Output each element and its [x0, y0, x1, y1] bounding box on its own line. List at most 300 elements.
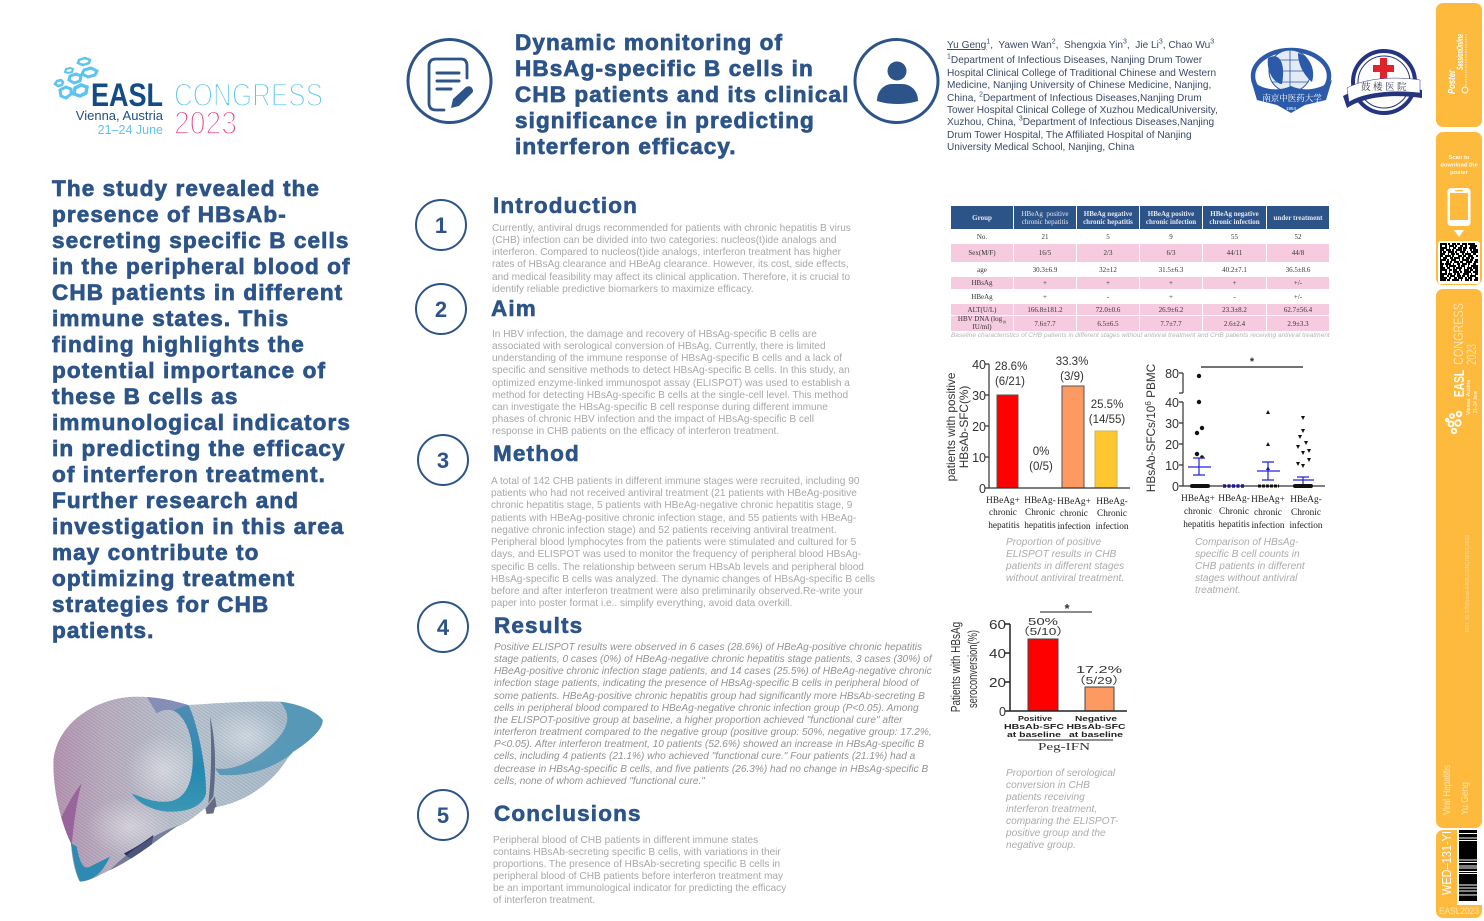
category labels: at baseline [1069, 730, 1123, 739]
bars [1028, 639, 1114, 711]
axes [1179, 373, 1325, 486]
text: results: Positive ELISPOT results were observed in 6 cases (28.6%) of HBeAg-positive chronic hepatitis [494, 642, 922, 653]
table: baseline characteristics: HBsAg [971, 279, 992, 287]
text: aim: In HBV infection, the damage and recovery of HBsAg-specific B cells are [492, 329, 817, 340]
bar value labels: (6/21) [995, 376, 1025, 388]
heading: introduction: Introduction [493, 193, 638, 218]
table: baseline characteristics: 55 [1231, 232, 1238, 240]
y axis title: patients with positive [944, 372, 958, 481]
category labels: HBeAg- [1024, 496, 1056, 506]
text: conclusions [493, 835, 786, 906]
icon: section number 1: 1 [435, 213, 447, 238]
axis values [1165, 367, 1179, 494]
table: baseline characteristics: + [1106, 279, 1110, 287]
mean and error bars [1188, 458, 1314, 484]
category labels: hepatitis [988, 521, 1020, 531]
affiliations: Drum Tower Hospital, The Affiliated Hospital of Nanjing [947, 130, 1192, 141]
logo: Nanjing Drum Tower Hospital [1343, 49, 1422, 115]
table: baseline characteristics: - [1233, 292, 1236, 300]
author names: Yu Geng1, Yawen Wan2, Shengxia Yin3, Jie Li3, Chao Wu3 [947, 39, 1214, 51]
heading: method: Method [493, 441, 580, 466]
caption: chart 2 [1195, 537, 1305, 596]
text: results: decrease in HBsAg-specific B cells, and five patients (26.3%) had no change in HBsAg-specific B [494, 764, 928, 775]
table: baseline characteristics: ALT(U/L) [968, 306, 996, 314]
text: results: infection stage patients, indicating the presence of HBsAg-specific B cells in peripheral blood of [494, 678, 919, 689]
icon: section number 5: 5 [437, 803, 449, 828]
Peg-IFN group label: Peg-IFN [1038, 741, 1090, 753]
sidebar panel: Poster Session Online [1436, 3, 1482, 127]
category labels: HBsAb-SFC [1066, 722, 1126, 731]
icon: section number 3 [417, 434, 469, 486]
caption: chart 2: treatment. [1195, 585, 1241, 596]
table: baseline characteristics: HBeAg negative [1084, 210, 1132, 218]
category labels: HBeAg- [1290, 495, 1322, 505]
heading: aim: Aim [491, 296, 537, 321]
axes [1005, 624, 1127, 711]
table: baseline characteristics: 2/3 [1104, 249, 1112, 257]
text: introduction: interferon. Compared to nucleos(t)ide analogs, interferon treatment has higher [492, 247, 841, 258]
icon: section number 2: 2 [435, 297, 447, 322]
table: baseline characteristics [951, 206, 1329, 331]
caption: chart 1 [1006, 537, 1124, 584]
affiliations [947, 54, 1218, 153]
title [515, 30, 849, 159]
table: baseline characteristics: 52 [1294, 232, 1302, 240]
text: aim: associated with serological conversion of HBsAg. Currently, there is limited [492, 341, 826, 352]
category labels: Chronic [1291, 508, 1321, 518]
affiliations: 1Department of Infectious Diseases, Nanjing Drum Tower [947, 54, 1202, 66]
table: baseline characteristics: 44/11 [1227, 249, 1242, 257]
text: results: cells in peripheral blood compared to HBeAg-negative chronic infection group (P<0.05). Among [494, 703, 919, 714]
text: method: paper into poster format i.e.. simplify everything, avoid data overkill. [491, 598, 792, 609]
bar value labels [995, 356, 1125, 473]
topic and author: Viral Hepatitis [1441, 765, 1453, 815]
key message text: strategies for CHB [52, 592, 269, 617]
heading: results: Results [494, 613, 583, 638]
axis values: 60 [989, 618, 1006, 632]
category labels: at baseline [1007, 730, 1061, 739]
logo: Nanjing University of Chinese Medicine: 1954 [1286, 106, 1297, 111]
text: method: chronic hepatitis stage, 5 patients with HBeAg-negative chronic hepatitis stage, 9 [491, 500, 852, 511]
key message text [52, 176, 351, 643]
text: results [494, 642, 932, 787]
key message text: The study revealed the [52, 176, 320, 201]
table: baseline characteristics: 36.5±8.6 [1286, 266, 1310, 274]
category labels: infection [1251, 520, 1285, 531]
table: baseline characteristics: HBeAg positive [1148, 210, 1194, 218]
barcode [1457, 830, 1482, 905]
table: baseline characteristics: 26.9±6.2 [1159, 306, 1183, 314]
caption: chart 3: positive group and the [1006, 828, 1106, 839]
y axis title: HBsAb-SFC(%) [957, 386, 971, 468]
data points: group 3 [1258, 410, 1279, 486]
affiliations: Xuzhou, China, 3Department of Infectious Diseases,Nanjing [947, 116, 1214, 128]
text: introduction [492, 223, 851, 295]
category labels: chronic [989, 508, 1017, 518]
text: results: some patients. HBeAg-positive chronic hepatitis group had significantly more HBsAb-secreting B [494, 691, 925, 702]
category labels: chronic [1060, 509, 1088, 519]
scan instruction: Scan to [1449, 155, 1470, 161]
table: baseline characteristics: chronic hepatitis [1022, 218, 1068, 226]
text: introduction: (CHB) infection can be divided into two categories: nucleos(t)ide analogs and [492, 235, 837, 246]
text: introduction: identify reliable predictive biomarkers to maximize efficacy. [492, 284, 754, 295]
title: CHB patients and its clinical [515, 82, 849, 107]
bar value labels [1016, 616, 1126, 687]
caption: chart 3: Proportion of serological [1006, 768, 1115, 779]
category labels: Chronic [1219, 507, 1249, 517]
sidebar panel: congress and topic [1436, 289, 1482, 828]
text: aim: specific and sensitive methods to detect HBsAg-specific B cells. In this study, an [492, 365, 850, 376]
text: introduction: and medical feasibility may affect its clinical application. Therefore, it is crucial to [492, 272, 850, 283]
bar value labels: 50% [1028, 616, 1058, 628]
text: method: patients with HBeAg-positive chronic infection stage, and 55 patients with HBeAg- [491, 513, 856, 524]
text: method: before and after interferon treatment were also preliminarily observed.Re-write your [491, 586, 863, 597]
axis values: 40 [1165, 396, 1179, 410]
panel: aim [415, 283, 850, 437]
table: baseline characteristics: chronic infection [1146, 218, 1196, 226]
category labels: Chronic [1097, 509, 1127, 519]
table: baseline characteristics: IU/ml) [972, 322, 992, 330]
axis values: 10 [972, 451, 986, 465]
table: baseline characteristics: - [1107, 292, 1109, 300]
key message text: patients. [52, 618, 154, 643]
key message text: in the peripheral blood of [52, 254, 351, 279]
icon: section number 2 [415, 283, 467, 335]
y axis title: HBsAb-SFCs/10 [1144, 406, 1158, 492]
text: conclusions: proportions. The presence of HBsAb-secreting specific B cells in [493, 859, 780, 870]
logo: EASL Congress 2023: 2023 [174, 105, 237, 141]
affiliations: Medicine, Nanjing University of Chinese Medicine, Nanjing, [947, 80, 1211, 91]
axis values: 20 [1165, 438, 1179, 452]
icon: document with pencil [406, 38, 492, 124]
chart: serological conversion [950, 601, 1127, 753]
category labels: HBeAg+ [1057, 497, 1091, 507]
caption: chart 2: specific B cell counts in [1195, 549, 1300, 560]
significance bracket [1201, 356, 1303, 368]
table: baseline characteristics: HBeAg [971, 292, 993, 300]
bar value labels: 0% [1033, 446, 1049, 458]
scan instruction: download the [1440, 162, 1478, 168]
key message text: these B cells as [52, 384, 238, 409]
table: baseline characteristics: HBeAg positive [1021, 210, 1069, 218]
caption: chart 1: without antiviral treatment. [1006, 573, 1124, 584]
bar value labels: （5/29） [1072, 675, 1126, 687]
category labels: HBeAg- [1096, 497, 1128, 507]
bar value labels: 33.3% [1056, 356, 1088, 368]
affiliations: Tower Hospital Clinical College of Xuzhou MedicalUniversity, [947, 105, 1218, 116]
text: results: the ELISPOT-positive group at baseline, a higher proportion achieved "functional cure" after [494, 715, 903, 726]
caption: chart 3: conversion in CHB [1006, 780, 1090, 791]
scan instruction [1440, 155, 1478, 176]
table: baseline characteristics: + [1043, 279, 1047, 287]
caption: chart 2: CHB patients in different [1195, 561, 1305, 572]
heading: conclusions: Conclusions [494, 801, 642, 826]
text: aim: optimized enzyme-linked immunospot assay (ELISPOT) was used to establish a [492, 378, 850, 389]
title: HBsAg-specific B cells in [515, 56, 814, 81]
category labels [986, 496, 1129, 532]
chart: proportion of positive ELISPOT results [944, 356, 1130, 532]
rotated congress logo: 21–24 June [1473, 391, 1479, 413]
table: baseline characteristics: 166.8±181.2 [1027, 306, 1063, 314]
table: baseline characteristics: age [977, 266, 987, 274]
category labels: chronic [1184, 507, 1212, 517]
text: conclusions: of interferon treatment. [493, 895, 595, 906]
text: method: HBsAg-specific B cells was analyzed. The dynamic changes of HBsAg-specific B cells [491, 574, 875, 585]
icon: author [854, 38, 940, 124]
table: baseline characteristics: +/- [1294, 292, 1302, 300]
key message text: immune states. This [52, 306, 289, 331]
y axis title [944, 372, 971, 481]
axis values: 0 [999, 705, 1006, 719]
category labels: hepatitis [1183, 520, 1215, 530]
title: Dynamic monitoring of [515, 30, 783, 55]
caption: chart 3 [1006, 768, 1118, 851]
data points: group 2 [1223, 484, 1245, 488]
bar value labels: （5/10） [1016, 626, 1070, 638]
text: method: days, and ELISPOT was used to monitor the frequency of peripheral blood HBsAg- [491, 549, 861, 560]
table: baseline characteristics: + [1233, 279, 1236, 287]
axis values: 20 [972, 420, 986, 434]
axis values: 0 [1172, 480, 1179, 494]
caption: chart 1: Proportion of positive [1006, 537, 1101, 548]
table: baseline characteristics: 2.9±3.3 [1287, 320, 1309, 328]
authors and affiliations [947, 38, 1218, 153]
y axis title [950, 622, 980, 712]
text: results: stage patients, 0 cases (0%) of HBeAg-negative chronic hepatitis stage patients, 3 cases (30%) of [494, 654, 932, 665]
bar value labels: 28.6% [995, 361, 1027, 373]
category labels: Positive [1018, 714, 1052, 723]
category labels: infection [1095, 521, 1129, 532]
title: interferon efficacy. [515, 134, 737, 159]
y axis title: Patients with HBsAg [950, 622, 963, 712]
significance line [1040, 601, 1092, 616]
table: baseline characteristics: + [1169, 292, 1173, 300]
text: method: patients who had not received antiviral treatment (21 patients with HBeAg-positive [491, 488, 857, 499]
table: baseline characteristics: HBeAg negative [1210, 210, 1259, 218]
congress tag: EASL2023 [1439, 906, 1479, 916]
logo: EASL Congress 2023: EASL [91, 77, 163, 113]
table: baseline characteristics: 9 [1169, 232, 1173, 240]
text: aim [492, 329, 850, 437]
table: baseline characteristics: chronic infection [1209, 218, 1260, 226]
key message text: in predicting the efficacy [52, 436, 346, 461]
text: aim: can investigate the HBsAg-specific B cell response during different immune [492, 402, 828, 413]
caption: chart 2: stages without antiviral [1195, 573, 1297, 584]
significance line: * [1064, 601, 1070, 616]
caption: chart 3: patients receiving [1006, 792, 1085, 803]
category labels: Negative [1075, 714, 1117, 723]
chart: HBsAb-SFCs counts [1144, 356, 1325, 531]
text: aim: response in CHB patients on the efficacy of interferon treatment. [492, 426, 779, 437]
panel: results [417, 601, 932, 787]
axis values: 20 [989, 676, 1006, 690]
sidebar panel: Poster Session Online: SessionOnline [1455, 34, 1466, 70]
table: baseline characteristics: Sex(M/F) [968, 249, 996, 257]
text: aim: method for detecting HBsAg-specific B cells at the single-cell level. This method [492, 390, 848, 401]
caption: chart 1: patients in different stages [1006, 561, 1124, 572]
bar value labels: 25.5% [1091, 399, 1123, 411]
axes [985, 364, 1130, 488]
text: conclusions: be an important immunological indicator for predicting the efficacy [493, 883, 786, 894]
key message text: potential importance of [52, 358, 326, 383]
table: baseline characteristics: 6.5±6.5 [1097, 320, 1119, 328]
icon: section number 4 [417, 601, 469, 653]
data points: group 4 [1293, 416, 1313, 488]
bar value labels: (14/55) [1089, 414, 1125, 426]
axis values: 0 [979, 482, 986, 496]
table: baseline characteristics: + [1043, 292, 1047, 300]
y axis title: PBMC [1144, 363, 1158, 401]
category labels: HBeAg+ [986, 496, 1020, 506]
title: significance in predicting [515, 108, 815, 133]
Peg-IFN group label [1018, 740, 1113, 753]
affiliations: China, 2Department of Infectious Diseases,Nanjing Drum [947, 91, 1202, 104]
icon: section number 3: 3 [437, 448, 449, 473]
table: baseline characteristics: 16/5 [1039, 249, 1051, 257]
axis values: 80 [1165, 367, 1179, 381]
category labels: HBeAg+ [1181, 494, 1215, 504]
table: baseline characteristics: 21 [1042, 232, 1048, 240]
sidebar panel: scan QR code [1436, 132, 1482, 285]
topic and author [1441, 765, 1471, 815]
table: baseline characteristics: 6/3 [1167, 249, 1175, 257]
DOI text: DOI: 10.3252/pose.EASLCONGRESS.2023 [1465, 535, 1471, 632]
icon: section number 4: 4 [437, 615, 450, 640]
y axis title: 6 [1144, 401, 1153, 406]
table: baseline characteristics: 2.6±2.4 [1224, 320, 1245, 328]
sidebar panel: poster code and barcode [1436, 830, 1482, 918]
icon: section number 1 [415, 199, 467, 251]
panel: conclusions [417, 789, 786, 906]
logo: EASL Congress 2023: 21–24 June [98, 123, 163, 137]
category labels [1004, 714, 1126, 739]
panel: introduction [415, 193, 851, 295]
key message text: of interferon treatment. [52, 462, 326, 487]
category labels: HBeAg- [1218, 494, 1250, 504]
table: baseline characteristics: 23.3±8.2 [1222, 306, 1247, 314]
y axis title: seroconversion(%) [967, 630, 980, 708]
table: baseline characteristics: 31.5±6.3 [1159, 266, 1183, 274]
text: conclusions: contains HBsAb-secreting specific B cells, with variations in their [493, 847, 781, 858]
key message text: Further research and [52, 488, 299, 513]
caption: chart 3: negative group. [1006, 840, 1076, 851]
key message text: secreting specific B cells [52, 228, 349, 253]
QR code [1438, 241, 1480, 284]
table: baseline characteristics: 7.6±7.7 [1034, 320, 1056, 328]
logo: EASL Congress 2023 [53, 56, 323, 141]
category labels [1181, 494, 1323, 531]
bar value labels: (3/9) [1060, 371, 1084, 383]
table: baseline characteristics: 72.0±0.6 [1096, 306, 1120, 314]
key message text: optimizing treatment [52, 566, 295, 591]
category labels: Chronic [1025, 508, 1055, 518]
category labels: infection [1057, 521, 1091, 532]
table caption: Baseline characteristics of CHB patients in different stages without antiviral treatment and CHB patients receiving antiviral treatment [951, 332, 1330, 339]
table: baseline characteristics: No. [977, 232, 987, 240]
caption: chart 2: Comparison of HBsAg- [1195, 537, 1299, 548]
text: method: specific B cells. The relationship between serum HBsAb levels and peripheral blood [491, 562, 864, 573]
caption: chart 3: interferon treatment, [1006, 804, 1097, 815]
text: method: negative chronic infection stage) and 52 patients receiving antiviral treatment. [491, 525, 837, 536]
table: baseline characteristics: 30.3±6.9 [1033, 266, 1057, 274]
text: aim: understanding of the immune response of HBsAg-specific B cells and a lack of [492, 353, 842, 364]
text: introduction: Currently, antiviral drugs recommended for patients with chronic hepatitis B virus [492, 223, 851, 234]
text: results: interferon treatment compared to the negative group (positive group: 50%, negative group: 17.2%, [494, 727, 932, 738]
table: baseline characteristics: 40.2±7.1 [1222, 266, 1247, 274]
bars [997, 386, 1117, 488]
text: introduction: rates of HBsAg clearance and HBeAg clearance. However, its cost, side effects, [492, 259, 849, 270]
affiliations: University Medical School, Nanjing, China [947, 142, 1134, 153]
scan instruction: poster [1450, 170, 1469, 176]
table: baseline characteristics: 62.7±56.4 [1284, 306, 1312, 314]
text: aim: phases of chronic HBV infection and the impact of HBsAg-specific B cell [492, 414, 814, 425]
logo: Nanjing Drum Tower Hospital: 鼓楼医院 [1361, 79, 1409, 93]
category labels: hepatitis [1024, 521, 1056, 531]
icon: phone [1448, 188, 1470, 237]
sidebar panel: Poster Session Online: Poster [1446, 69, 1458, 94]
text: conclusions: Peripheral blood of CHB patients in different immune states [493, 835, 758, 846]
text: results: cells, none of whom achieved "functional cure." [494, 776, 705, 787]
rotated congress logo: Vienna, Austria [1466, 379, 1472, 415]
axis values: 30 [972, 389, 986, 403]
axis values [989, 618, 1006, 719]
caption: chart 3: comparing the ELISPOT- [1006, 816, 1118, 827]
text: method: Peripheral blood lymphocytes from the patients were stimulated and cultured for 5 [491, 537, 856, 548]
illustration: liver [53, 696, 323, 882]
axis values: 40 [972, 358, 986, 372]
table: baseline characteristics: +/- [1294, 279, 1302, 287]
text: results: cells, including 4 patients (21.1%) who achieved "functional cure." Four patients (21.1%) had a [494, 751, 915, 762]
key message text: may contribute to [52, 540, 259, 565]
affiliations: Hospital Clinical College of Traditional Chinese and Western [947, 68, 1216, 79]
table: baseline characteristics: 44/8 [1292, 249, 1304, 257]
axis values [972, 358, 986, 496]
text: method: A total of 142 CHB patients in different immune stages were recruited, including 90 [491, 476, 859, 487]
key message text: presence of HBsAb- [52, 202, 287, 227]
text: conclusions: peripheral blood of CHB patients before interferon treatment may [493, 871, 783, 882]
text: results: P<0.05). After interferon treatment, 10 patients (52.6%) showed an increase in HBsAg-specific B [494, 739, 924, 750]
axis values: 10 [1165, 459, 1179, 473]
category labels: HBsAb-SFC [1004, 722, 1065, 731]
key message text: CHB patients in different [52, 280, 343, 305]
table: baseline characteristics: under treatment [1274, 214, 1322, 222]
bar value labels: (0/5) [1029, 461, 1053, 473]
panel: method [417, 434, 875, 609]
category labels: HBeAg+ [1251, 495, 1285, 505]
category labels: chronic [1254, 508, 1282, 518]
table: baseline characteristics: 7.7±7.7 [1160, 320, 1182, 328]
axis values: 30 [1165, 417, 1179, 431]
rotated congress logo: EASL [1452, 370, 1468, 397]
axis values: 40 [989, 647, 1006, 661]
category labels: infection [1289, 520, 1323, 531]
table: baseline characteristics: + [1169, 279, 1173, 287]
table: baseline characteristics: 32±12 [1099, 266, 1117, 274]
rotated congress logo [1446, 303, 1479, 433]
topic and author: Yu Geng [1459, 782, 1471, 815]
key message text: immunological indicators [52, 410, 351, 435]
data points: group 1 [1190, 374, 1210, 488]
rotated congress logo: 2023 [1463, 344, 1479, 365]
text: results: HBeAg-positive chronic infection stage patients, and 14 cases (25.5%) of HBeAg-negative chronic [494, 666, 932, 677]
key message text: investigation in this area [52, 514, 344, 539]
bar value labels: 17.2% [1076, 664, 1122, 676]
table: baseline characteristics: Group [972, 214, 992, 222]
significance bracket: * [1250, 356, 1255, 368]
logo: Nanjing University of Chinese Medicine [1250, 48, 1332, 113]
logo: Nanjing University of Chinese Medicine: 南京中医药大学 [1262, 92, 1322, 104]
icon: section number 5 [417, 789, 469, 841]
